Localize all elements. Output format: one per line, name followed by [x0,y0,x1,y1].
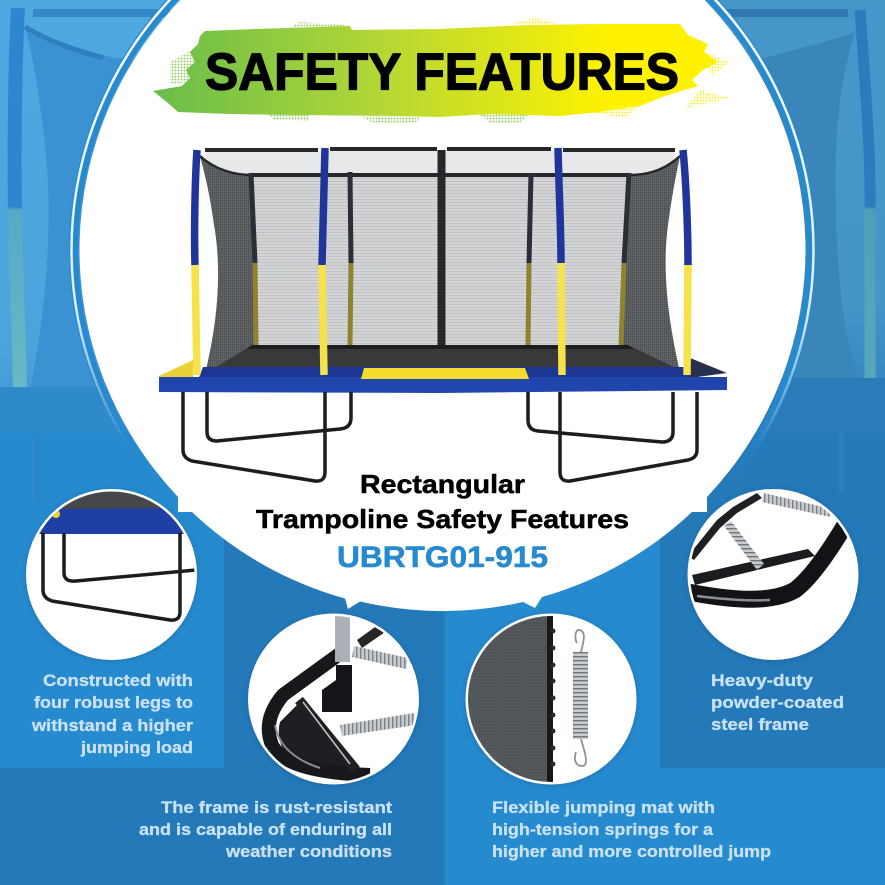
title: SAFETY FEATURES [205,44,679,102]
caption: legs: Constructed with [43,671,193,690]
circle: legs detail [26,489,197,660]
net: centre panel [205,151,675,347]
net: side panels [200,156,680,374]
caption: steel frame [711,671,844,734]
faded trampoline photo, right [660,0,885,493]
caption: jumping mat: higher and more controlled jump [492,842,771,861]
title brush stroke [153,18,730,124]
caption: steel frame: powder-coated [711,693,844,712]
subtitle: Trampoline Safety Features [256,504,629,534]
circle: steel frame detail [688,489,858,660]
back poles [251,172,629,345]
ring around main circle [72,0,814,619]
legs [183,392,697,481]
caption: legs: four robust legs to [34,693,193,712]
caption: jumping mat: high-tension springs for a [492,820,714,839]
caption: steel frame: steel frame [711,715,809,734]
subtitle [256,469,629,534]
caption: rust resistance [139,798,392,861]
spring [573,630,588,766]
front poles [195,148,688,375]
caption: jumping mat [492,798,771,861]
circle: mat and spring detail [460,610,636,790]
caption: rust resistance: weather conditions [225,842,392,861]
caption: legs [31,671,193,757]
caption: rust resistance: The frame is rust-resistant [161,798,392,817]
model number: UBRTG01-915 [337,541,548,574]
caption: rust resistance: and is capable of enduring all [139,820,392,839]
frame pad [159,358,727,393]
caption: steel frame: Heavy-duty [711,671,814,690]
caption: legs: withstand a higher [31,716,193,735]
circle: frame joint detail [248,612,419,784]
faded trampoline photo, left [0,0,284,503]
subtitle: Rectangular [360,469,525,499]
main white circle with pointer tabs [80,0,806,611]
caption: legs: jumping load [80,738,193,757]
jumping mat [200,345,690,380]
net: top bars and curved edges [200,149,680,366]
caption: jumping mat: Flexible jumping mat with [492,798,715,817]
rectangular trampoline photo [159,148,727,481]
